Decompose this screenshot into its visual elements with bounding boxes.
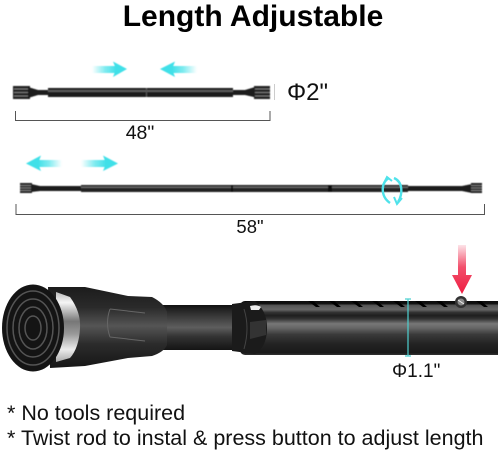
short rod [13, 86, 270, 99]
icon: outward arrow left [26, 156, 62, 171]
adjustable outer tube [240, 301, 498, 355]
adjustment holes [308, 301, 488, 307]
label: rod diameter 2 inch: Φ2" [287, 79, 328, 106]
chrome ring [56, 292, 80, 362]
collar ribs [108, 309, 145, 341]
icon: inward arrow right [92, 62, 127, 77]
narrow inner tube [160, 305, 245, 350]
large rod close-up [2, 284, 498, 372]
icon: inward arrow left [160, 62, 197, 77]
title: Length Adjustable [123, 0, 383, 33]
label: 58 inch: 58" [236, 216, 264, 237]
label: tube diameter 1.1 inch: Φ1.1" [392, 361, 440, 382]
foot collar [48, 287, 167, 368]
dimension: 58 inch bracket [16, 204, 484, 214]
icon: twist rotation arrows [383, 177, 402, 204]
icon: outward arrow right [81, 156, 118, 171]
label: 48 inch: 48" [126, 122, 154, 144]
note: twist rod to install: * Twist rod to instal & press button to adjust length [7, 426, 483, 450]
rubber foot [2, 284, 64, 372]
dimension: 48 inch bracket [16, 111, 270, 120]
note: no tools required: * No tools required [7, 401, 185, 425]
long rod [20, 183, 482, 193]
locking collar [232, 301, 267, 354]
icon: red press arrow [452, 245, 472, 294]
push button [455, 296, 467, 308]
dimension: tube diameter line [405, 299, 411, 356]
